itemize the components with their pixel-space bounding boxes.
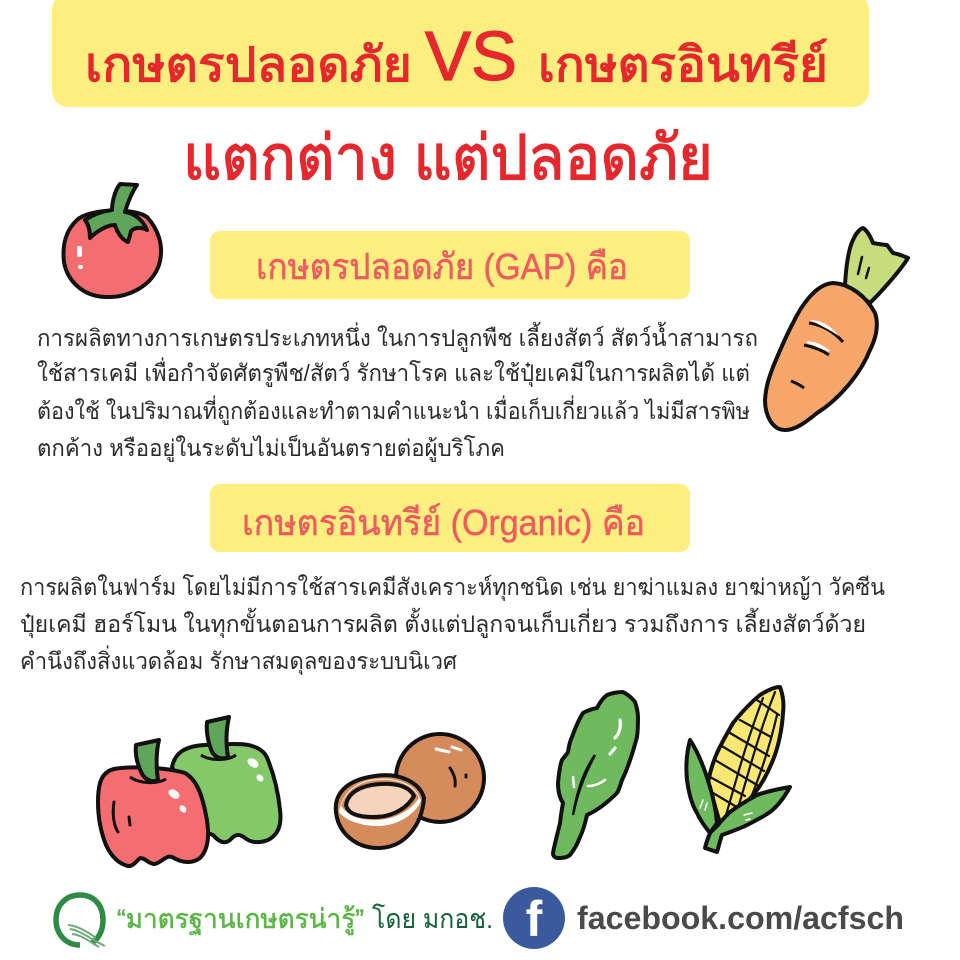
title: organic term: เกษตรอินทรีย์ [538, 39, 828, 92]
panel: GAP heading [210, 231, 690, 299]
title: VS: VS [425, 17, 517, 95]
icon: facebook: f [526, 891, 543, 947]
facebook url: facebook.com/acfsch [577, 900, 904, 936]
text block: organic definition: ปุ๋ยเคมี ฮอร์โมน ในทุกขั้นตอนการผลิต ตั้งแต่ปลูกจนเก็บเกี่ยว รวมถึงการ เลี้ยงสัตว์ด้วย [20, 608, 866, 638]
icon: carrot [765, 228, 908, 430]
text block: organic definition: คำนึงถึงสิ่งแวดล้อม รักษาสมดุลของระบบนิเวศ [20, 645, 457, 675]
text block: organic definition [20, 574, 885, 675]
footer credit: quoted title: “มาตรฐานเกษตรน่ารู้” [117, 904, 364, 935]
panel: GAP heading: เกษตรปลอดภัย (GAP) คือ [256, 246, 628, 287]
green pepper [172, 717, 280, 842]
subtitle: แตกต่าง แต่ปลอดภัย [183, 124, 713, 193]
logo: Q mark [56, 895, 105, 947]
text block: organic definition: การผลิตในฟาร์ม โดยไม่มีการใช้สารเคมีสังเคราะห์ทุกชนิด เช่น ยาฆ่าแมลง ยาฆ่าหญ้า วัคซีน [20, 574, 885, 601]
panel: organic heading [210, 484, 690, 552]
text block: GAP definition [37, 322, 758, 462]
icon: bell peppers [98, 717, 280, 866]
icon: corn [686, 687, 790, 852]
icon: leafy green [553, 692, 638, 858]
panel: organic heading: เกษตรอินทรีย์ (Organic) คือ [242, 502, 645, 543]
title: GAP term: เกษตรปลอดภัย [85, 39, 412, 92]
title banner [52, 0, 869, 107]
text block: GAP definition: ตกค้าง หรืออยู่ในระดับไม่เป็นอันตรายต่อผู้บริโภค [37, 433, 505, 462]
text block: GAP definition: ต้องใช้ ในปริมาณที่ถูกต้องและทำตามคำแนะนำ เมื่อเก็บเกี่ยวแล้ว ไม่มีสารพิษ [37, 395, 750, 425]
icon: coconuts [336, 734, 484, 848]
text block: GAP definition: ใช้สารเคมี เพื่อกำจัดศัตรูพืช/สัตว์ รักษาโรค และใช้ปุ๋ยเคมีในการผลิตได้ แต่ [37, 357, 750, 387]
icon: facebook [503, 887, 565, 949]
footer [56, 887, 904, 949]
text block: GAP definition: การผลิตทางการเกษตรประเภทหนึ่ง ในการปลูกพืช เลี้ยงสัตว์ สัตว์น้ำสามารถ [37, 322, 758, 352]
footer credit: publisher: โดย มกอช. [372, 904, 493, 934]
icon: tomato [64, 184, 161, 297]
red pepper [98, 740, 208, 866]
